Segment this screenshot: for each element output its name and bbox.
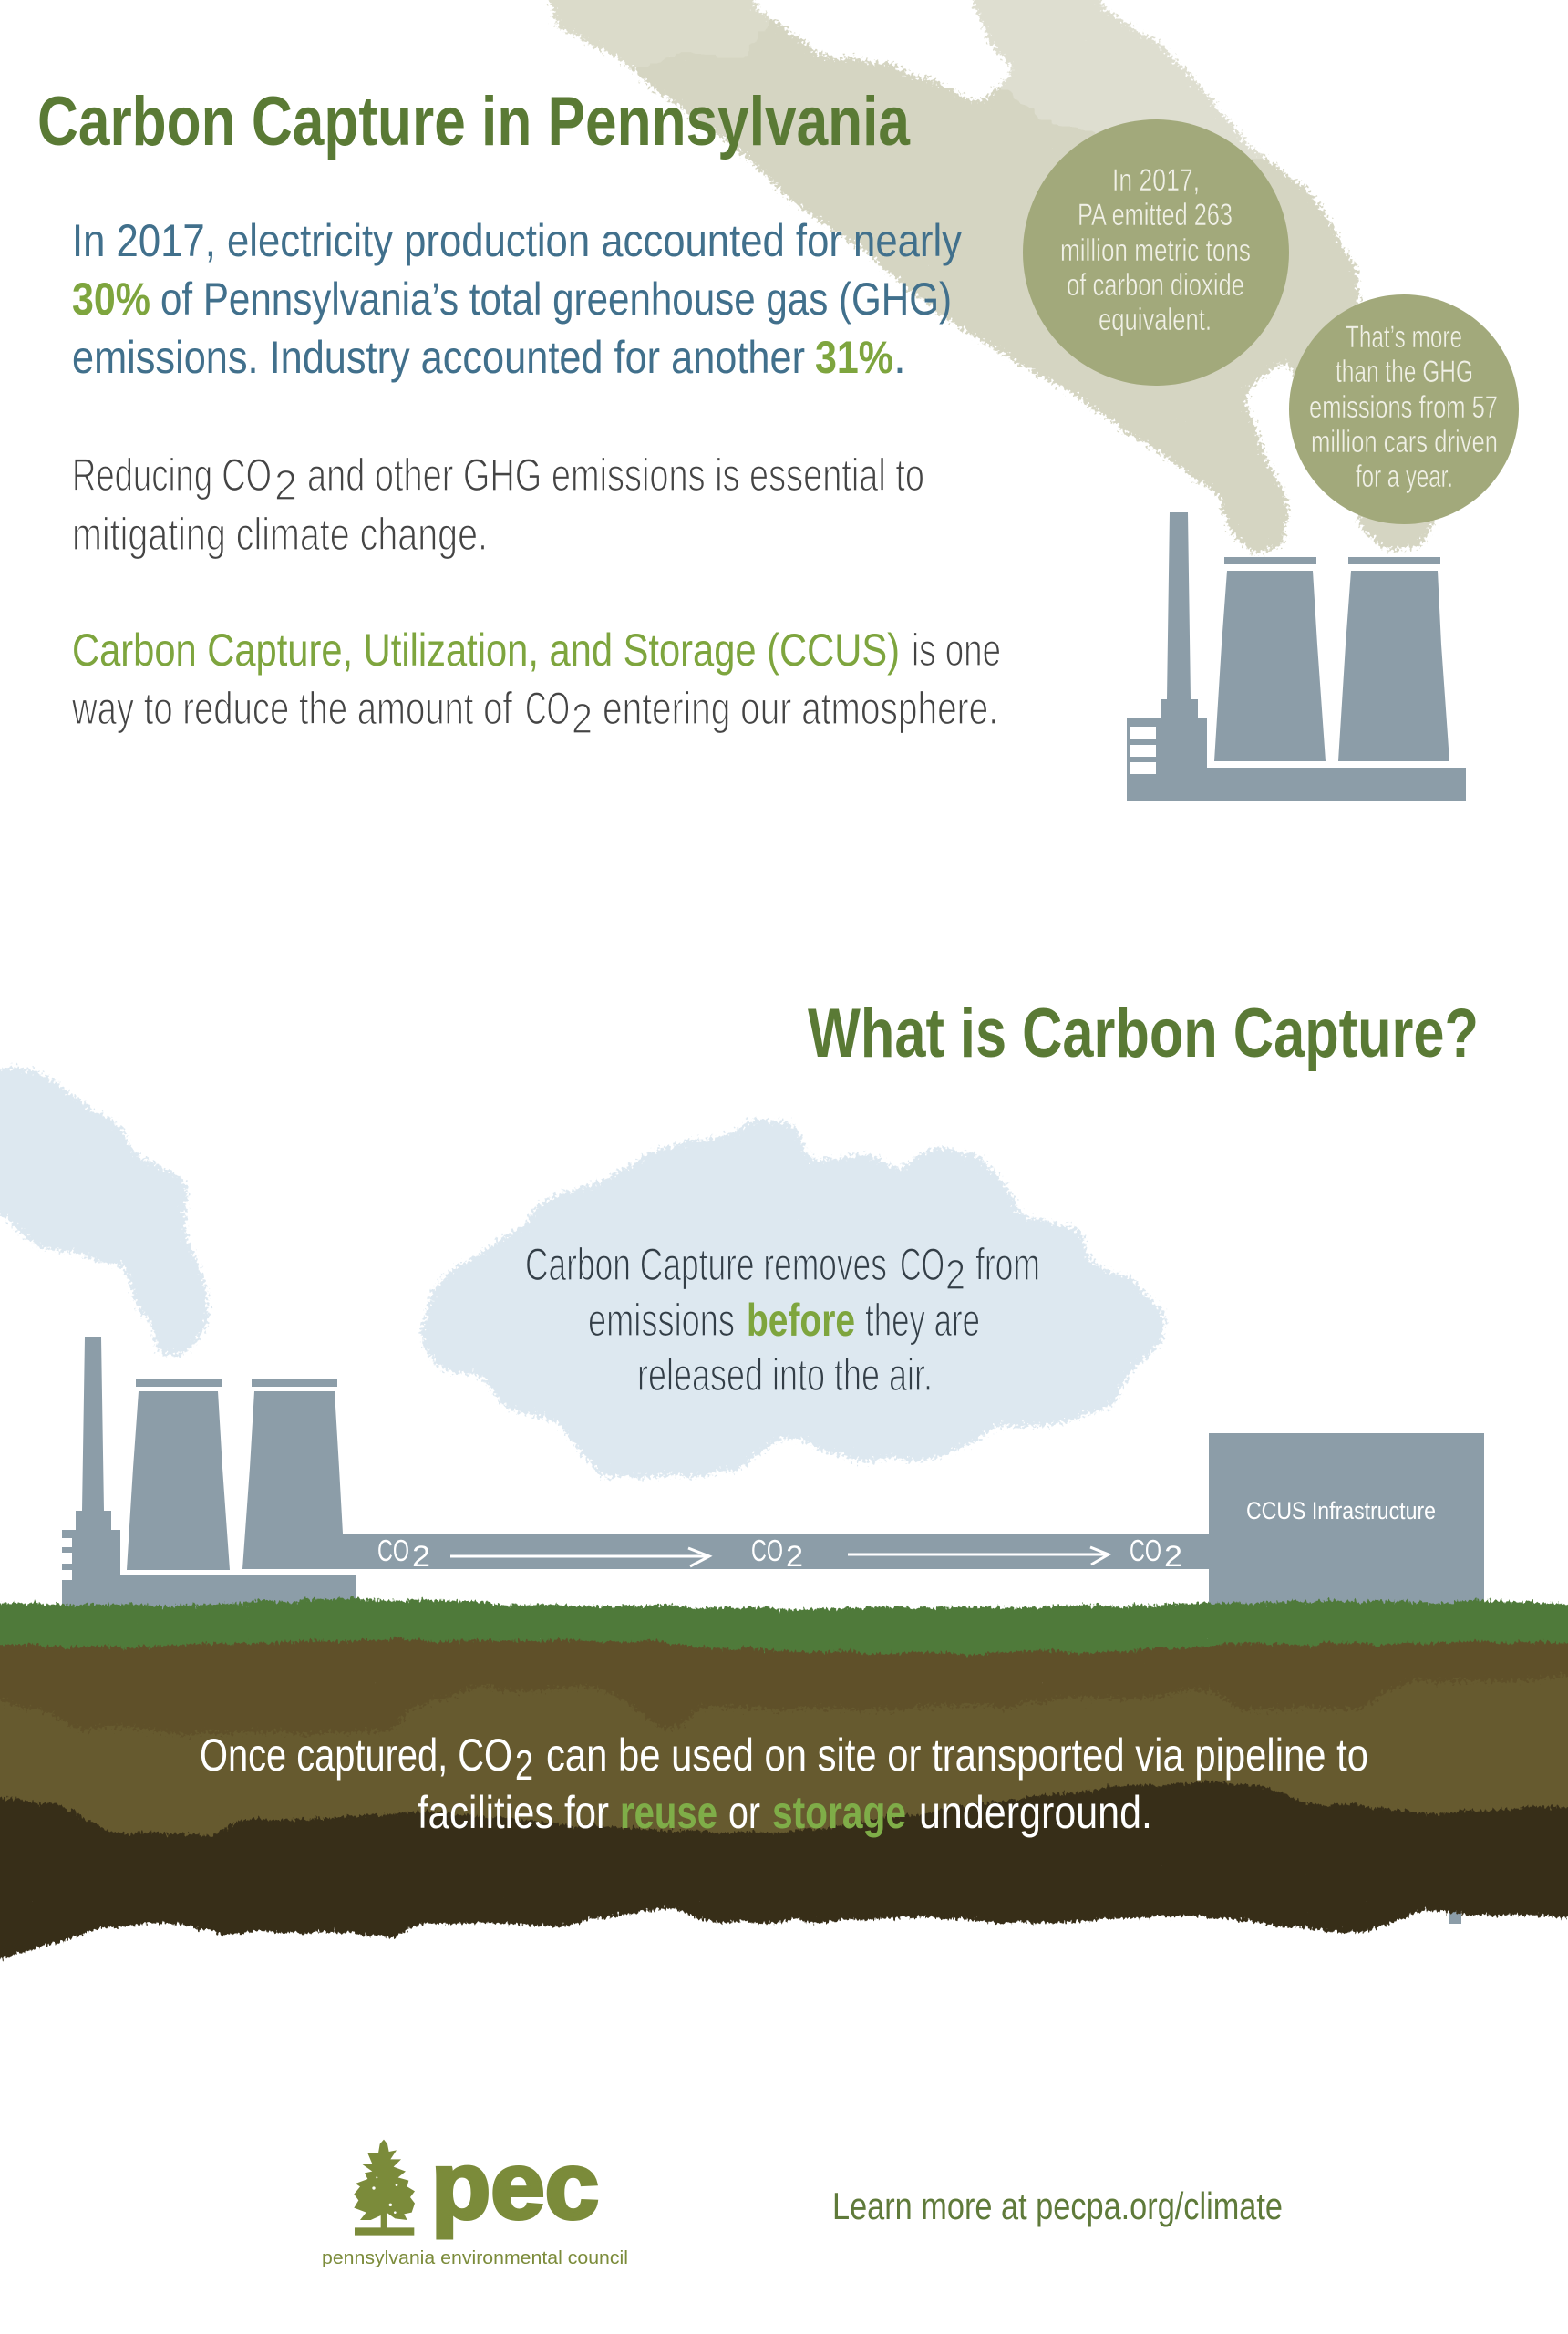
ground text: reuse or storage: storage (772, 1787, 906, 1838)
paragraph: CCUS definition: is one (912, 625, 1001, 676)
logo: Pennsylvania Environmental Council: pennsylvania environmental council (322, 2248, 628, 2268)
smoke plume: lower plant (0, 1062, 211, 1362)
intro paragraph: emissions share: of Pennsylvania’s total greenhouse gas (GHG) (160, 274, 952, 325)
cloud with explanation: released into the air. (637, 1349, 933, 1400)
cloud with explanation: 2 (945, 1251, 965, 1298)
ground text: reuse or storage: Once captured, CO (200, 1730, 512, 1781)
callout circle: 263 million metric tons: million metric tons (1060, 233, 1251, 268)
ground text: reuse or storage: facilities for (418, 1787, 609, 1838)
intro paragraph: emissions share: emissions. Industry accounted for another (72, 332, 805, 383)
arrow: second pipeline segment (848, 1547, 1109, 1565)
cloud with explanation: Carbon Capture removes (525, 1239, 887, 1290)
smoke plumes: top section (549, 0, 1437, 554)
paragraph: reducing emissions: mitigating climate change. (72, 509, 488, 560)
callout circle: 263 million metric tons: equivalent. (1099, 303, 1212, 337)
intro paragraph: emissions share: . (893, 332, 906, 383)
paragraph: reducing emissions: Reducing CO (72, 449, 272, 501)
cloud with explanation: CO (900, 1239, 944, 1290)
callout circle: 57 million cars: emissions from 57 (1309, 390, 1498, 425)
cloud with explanation: they are (865, 1295, 980, 1346)
intro paragraph: emissions share: In 2017, electricity production accounted for nearly (72, 215, 962, 266)
pipeline label: CO2 third: CO (1130, 1534, 1161, 1567)
callout circle: 57 million cars: than the GHG (1336, 355, 1473, 389)
callout circle: 57 million cars: for a year. (1356, 460, 1453, 494)
paragraph: CCUS definition: CO (525, 683, 570, 734)
callout circle: 263 million metric tons: of carbon dioxide (1067, 268, 1244, 303)
intro paragraph: emissions share (72, 215, 962, 383)
title: Carbon Capture in Pennsylvania (37, 83, 911, 160)
logo: Pennsylvania Environmental Council: pec (431, 2133, 599, 2239)
link text: learn more: Learn more at pecpa.org/climate (832, 2184, 1283, 2227)
ground text: reuse or storage (200, 1730, 1368, 1838)
icon: power plant, top (1127, 512, 1466, 801)
ground text: reuse or storage: reuse (620, 1787, 717, 1838)
paragraph: CCUS definition: entering our atmosphere. (603, 683, 998, 734)
callout circle: 263 million metric tons: In 2017, (1112, 163, 1200, 198)
cloud with explanation (417, 1117, 1165, 1477)
ground text: reuse or storage: or (728, 1787, 760, 1838)
callout circle: 57 million cars: million cars driven (1311, 425, 1498, 460)
pipeline label: CO2 second: 2 (786, 1540, 803, 1573)
cloud with explanation: emissions (588, 1295, 735, 1346)
logo: Pennsylvania Environmental Council (322, 2133, 628, 2268)
icon: power plant, lower (62, 1337, 1212, 1623)
paragraph: CCUS definition: 2 (572, 695, 593, 742)
paragraph: CCUS definition: way to reduce the amount of (71, 683, 512, 734)
ground cross-section (0, 1597, 1568, 1967)
ground text: reuse or storage: can be used on site or transported via pipeline to (546, 1730, 1368, 1781)
pipeline label: CO2 first: CO (377, 1534, 409, 1567)
cloud with explanation: before (747, 1295, 855, 1346)
intro paragraph: emissions share: 30% (72, 274, 150, 325)
pipeline label: CO2 second: CO (751, 1534, 783, 1567)
callout circle: 263 million metric tons: PA emitted 263 (1078, 198, 1233, 232)
pipeline label: CO2 third: 2 (1164, 1540, 1182, 1573)
callout circle: 263 million metric tons (1023, 119, 1289, 386)
paragraph: reducing emissions: 2 (274, 461, 297, 509)
callout circle: 57 million cars: That’s more (1346, 320, 1462, 355)
ground text: reuse or storage: 2 (515, 1741, 533, 1789)
box: CCUS infrastructure: CCUS Infrastructure (1246, 1497, 1436, 1524)
ground text: reuse or storage: underground. (919, 1787, 1152, 1838)
paragraph: reducing emissions (72, 449, 924, 560)
box: CCUS infrastructure (1209, 1433, 1484, 1616)
paragraph: CCUS definition (71, 625, 1001, 742)
arrow: first pipeline segment (450, 1548, 709, 1566)
paragraph: reducing emissions: and other GHG emissions is essential to (307, 449, 924, 501)
cloud with explanation: from (975, 1239, 1040, 1290)
paragraph: CCUS definition: Carbon Capture, Utilization, and Storage (CCUS) (72, 625, 900, 676)
icon: pine tree (354, 2140, 415, 2236)
intro paragraph: emissions share: 31% (815, 332, 893, 383)
pipeline label: CO2 first: 2 (412, 1540, 430, 1573)
callout circle: 57 million cars (1289, 294, 1519, 524)
